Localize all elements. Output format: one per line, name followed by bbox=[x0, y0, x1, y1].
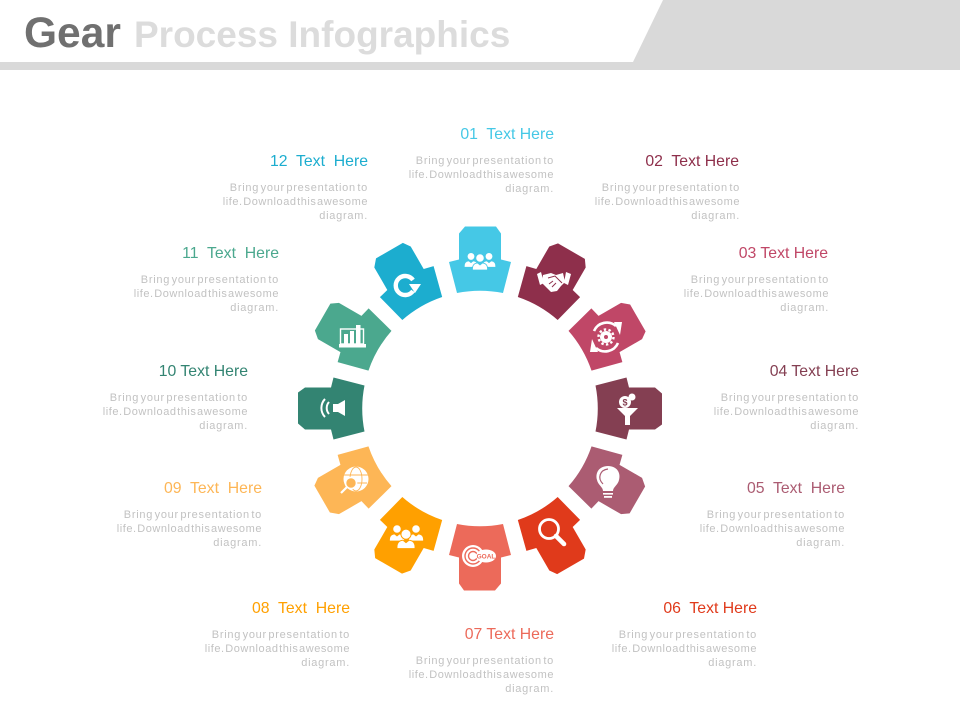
text block 02: 02 Text Here bbox=[645, 153, 739, 170]
gear 02 bbox=[511, 235, 598, 324]
text block 11: 11 Text Here bbox=[182, 245, 279, 262]
text block 09: diagram. bbox=[213, 537, 262, 549]
icon: laptop chart bbox=[339, 325, 366, 348]
gear 09 bbox=[307, 439, 395, 526]
text block 06: 06 Text Here bbox=[663, 600, 757, 617]
text block 04: Bring your presentation to bbox=[721, 392, 859, 404]
text block 11 bbox=[134, 245, 279, 314]
title bbox=[24, 10, 510, 57]
header band bbox=[0, 0, 960, 70]
text block 07: diagram. bbox=[505, 683, 554, 695]
icon: team bbox=[464, 253, 496, 270]
icon: refresh arrow bbox=[396, 276, 421, 295]
text block 10: life. Download this awesome bbox=[103, 406, 248, 418]
gear 05 bbox=[565, 439, 653, 526]
text block 10: Bring your presentation to bbox=[110, 392, 248, 404]
gear 01 bbox=[449, 226, 511, 293]
text block 05: Bring your presentation to bbox=[707, 509, 845, 521]
icon: megaphone bbox=[321, 399, 345, 417]
icon: group of people bbox=[389, 525, 424, 549]
text block 05: life. Download this awesome bbox=[700, 523, 845, 535]
text block 12 bbox=[223, 153, 368, 222]
title: Process Infographics bbox=[134, 14, 510, 55]
text block 08: 08 Text Here bbox=[252, 600, 350, 617]
text block 07: Bring your presentation to bbox=[416, 655, 554, 667]
text block 09: life. Download this awesome bbox=[117, 523, 262, 535]
text block 09: 09 Text Here bbox=[164, 480, 262, 497]
text block 07: life. Download this awesome bbox=[409, 669, 554, 681]
gear 07 bbox=[449, 524, 511, 590]
gear 10 bbox=[298, 378, 364, 440]
gear 04 bbox=[596, 378, 662, 440]
gear 12 bbox=[362, 235, 449, 324]
gear 06 bbox=[511, 493, 598, 582]
gear 08 bbox=[362, 493, 449, 582]
text block 03: life. Download this awesome bbox=[684, 288, 829, 300]
text block 08: life. Download this awesome bbox=[205, 643, 350, 655]
text block 02: diagram. bbox=[691, 210, 740, 222]
icon: goal target: GOAL bbox=[477, 554, 495, 560]
text block 12: 12 Text Here bbox=[270, 153, 368, 170]
text block 09: Bring your presentation to bbox=[124, 509, 262, 521]
text block 06: diagram. bbox=[708, 657, 757, 669]
text block 09 bbox=[117, 480, 262, 549]
text block 07: 07 Text Here bbox=[465, 626, 554, 643]
text block 11: life. Download this awesome bbox=[134, 288, 279, 300]
text block 11: Bring your presentation to bbox=[141, 274, 279, 286]
text block 12: Bring your presentation to bbox=[230, 182, 368, 194]
icon: money funnel bbox=[617, 394, 638, 425]
text block 03: 03 Text Here bbox=[739, 245, 828, 262]
text block 06: Bring your presentation to bbox=[619, 629, 757, 641]
text block 12: diagram. bbox=[319, 210, 368, 222]
text block 07 bbox=[409, 626, 554, 695]
icon: globe search bbox=[341, 466, 368, 493]
text block 04: diagram. bbox=[810, 420, 859, 432]
text block 11: diagram. bbox=[230, 302, 279, 314]
icon: gear cycle bbox=[590, 322, 622, 352]
text block 01: life. Download this awesome bbox=[409, 169, 554, 181]
text block 08: diagram. bbox=[301, 657, 350, 669]
icon: handshake bbox=[537, 272, 571, 292]
icon: light bulb bbox=[596, 466, 620, 498]
text block 10: diagram. bbox=[199, 420, 248, 432]
text block 01 bbox=[409, 126, 554, 195]
icon: money funnel: $ bbox=[622, 398, 628, 408]
text block 05: 05 Text Here bbox=[747, 480, 845, 497]
gear ring bbox=[298, 226, 662, 590]
text block 02 bbox=[595, 153, 740, 222]
text block 04: 04 Text Here bbox=[770, 363, 859, 380]
text block 03: diagram. bbox=[780, 302, 829, 314]
text block 04: life. Download this awesome bbox=[714, 406, 859, 418]
text block 08 bbox=[205, 600, 350, 669]
text block 10: 10 Text Here bbox=[159, 363, 248, 380]
text block 01: Bring your presentation to bbox=[416, 155, 554, 167]
text block 10 bbox=[103, 363, 248, 432]
icon: magnifier bbox=[540, 520, 564, 544]
text block 08: Bring your presentation to bbox=[212, 629, 350, 641]
text block 06 bbox=[612, 600, 757, 669]
text block 03: Bring your presentation to bbox=[691, 274, 829, 286]
text block 01: 01 Text Here bbox=[460, 126, 554, 143]
text block 01: diagram. bbox=[505, 183, 554, 195]
gear 03 bbox=[565, 291, 653, 378]
text block 05 bbox=[700, 480, 845, 549]
title: Gear bbox=[24, 10, 121, 57]
gear 11 bbox=[307, 291, 395, 378]
text block 03 bbox=[684, 245, 829, 314]
text block 12: life. Download this awesome bbox=[223, 196, 368, 208]
text block 04 bbox=[714, 363, 859, 432]
text block 02: Bring your presentation to bbox=[602, 182, 740, 194]
text block 06: life. Download this awesome bbox=[612, 643, 757, 655]
icon: goal target bbox=[462, 545, 496, 567]
text block 02: life. Download this awesome bbox=[595, 196, 740, 208]
text block 05: diagram. bbox=[796, 537, 845, 549]
